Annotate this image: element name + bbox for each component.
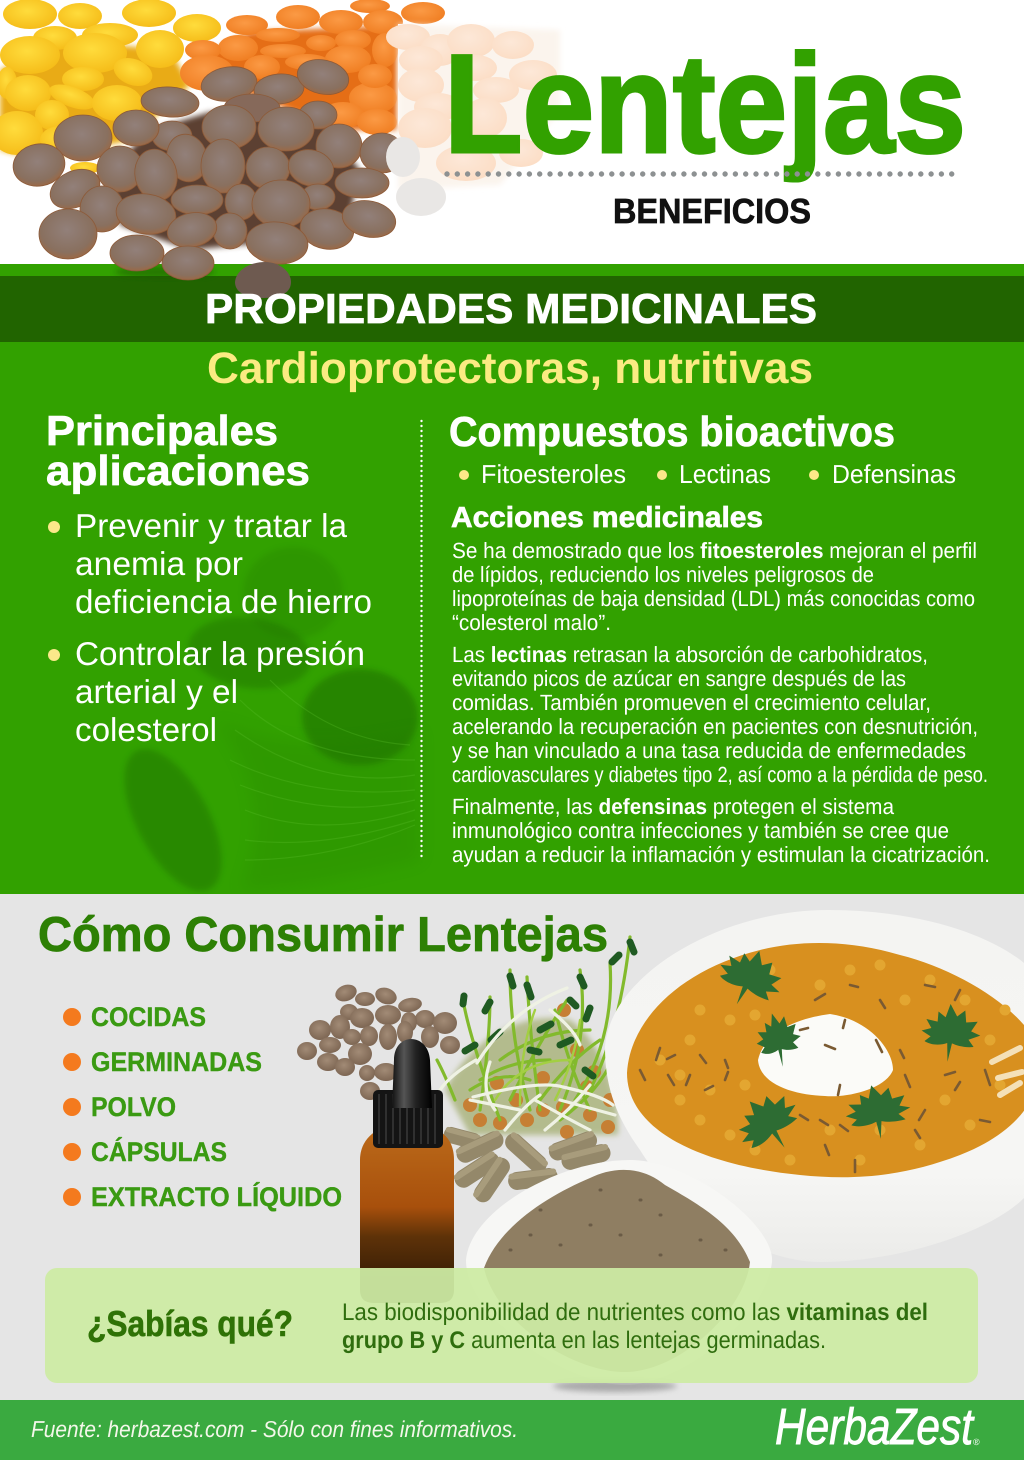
list: consumption forms: POLVO xyxy=(91,1092,176,1122)
text block: lectinas: evitando picos de azúcar en sangre después de las xyxy=(452,666,906,691)
panel: translucent title backing xyxy=(386,24,678,264)
list: compounds: Fitoesteroles xyxy=(481,459,626,489)
faded grey lentils xyxy=(386,137,446,216)
sprout foliage mass xyxy=(445,1018,618,1135)
heading: aplicaciones xyxy=(46,407,310,494)
callout heading: ¿Sabías qué? xyxy=(87,1303,293,1344)
list: item two: Controlar la presión xyxy=(75,635,365,672)
list: item one: deficiencia de hierro xyxy=(75,583,372,620)
list: item one xyxy=(48,507,372,620)
heading band: propiedades medicinales xyxy=(0,276,1024,342)
list: item two xyxy=(48,635,365,748)
soup peas xyxy=(660,965,1005,1160)
footer bar xyxy=(0,1400,1024,1460)
heading: aplicaciones: Principales xyxy=(46,407,278,454)
list: compounds: Lectinas xyxy=(679,459,771,489)
list: item one: Prevenir y tratar la xyxy=(75,507,348,544)
logo: HerbaZest: HerbaZest xyxy=(775,1398,975,1455)
subheading: properties: Cardioprotectoras, nutritivas xyxy=(207,344,813,393)
heading: como consumir lentejas: Cómo Consumir Lentejas xyxy=(38,908,608,962)
text block: fitoesteroles xyxy=(452,538,977,635)
text block: lectinas xyxy=(452,642,988,787)
image: dropper bottle xyxy=(360,1039,454,1303)
list: consumption forms: COCIDAS xyxy=(91,1002,206,1032)
parsley leaves xyxy=(708,938,983,1166)
image: lentil overlapping the dark band xyxy=(235,262,291,298)
callout text: grupo B y C aumenta en las lentejas germinadas. xyxy=(342,1327,826,1354)
text block: defensinas xyxy=(452,794,990,867)
image: orange lentils xyxy=(180,0,445,135)
soup highlights xyxy=(992,1048,1022,1095)
heading: aplicaciones: aplicaciones xyxy=(46,447,310,494)
image: brown lentils xyxy=(10,55,404,280)
text block: lectinas: acelerando la recuperación en pacientes con desnutrición, xyxy=(452,714,978,739)
title: Lentejas xyxy=(444,25,966,182)
text block: fitoesteroles: de lípidos, reduciendo los niveles peligrosos de xyxy=(452,562,874,587)
heading: propiedades medicinales: PROPIEDADES MEDICINALES xyxy=(205,285,817,332)
text block: fitoesteroles: Se ha demostrado que los fitoesteroles mejoran el perfil xyxy=(452,538,977,563)
powder speckles xyxy=(510,1190,726,1255)
logo: HerbaZest: ® xyxy=(973,1437,980,1447)
shadow under powder bowl xyxy=(553,1380,677,1392)
text block: defensinas: ayudan a reducir la inflamación y estimulan la cicatrización. xyxy=(452,842,990,867)
image: soup bowl xyxy=(605,910,1024,1262)
cumin seeds xyxy=(640,985,990,1172)
list: consumption forms: GERMINADAS xyxy=(91,1047,262,1077)
text block: lectinas: Las lectinas retrasan la absorción de carbohidratos, xyxy=(452,642,928,667)
dotted divider under title xyxy=(447,171,957,177)
image: yellow lentils xyxy=(0,0,221,174)
list: item two: colesterol xyxy=(75,711,217,748)
sour cream xyxy=(758,1014,893,1096)
subtitle: BENEFICIOS xyxy=(613,192,811,231)
sprout stems xyxy=(437,937,630,1120)
text block: fitoesteroles: lipoproteínas de baja densidad (LDL) más conocidas como xyxy=(452,586,975,611)
panel: green medicinal section background xyxy=(0,264,1024,906)
text block: fitoesteroles: “colesterol malo”. xyxy=(452,610,611,635)
sprout roots xyxy=(440,988,615,1130)
list: consumption forms: CÁPSULAS xyxy=(91,1137,227,1167)
panel: principales aplicaciones xyxy=(46,407,372,748)
heading: compuestos: Compuestos bioactivos xyxy=(449,408,895,455)
callout text xyxy=(342,1299,928,1354)
heading: acciones medicinales: Acciones medicinales xyxy=(451,502,763,534)
decorative cell texture xyxy=(105,547,420,906)
text block: lectinas: y se han vinculado a una tasa reducida de enfermedades xyxy=(452,738,966,763)
list: compounds xyxy=(459,459,956,489)
image: powder in white bowl xyxy=(466,1160,772,1385)
text block: lectinas: comidas. También promueven el crecimiento celular, xyxy=(452,690,931,715)
list: compounds: Defensinas xyxy=(832,459,956,489)
text block: defensinas: inmunológico contra infecciones y también se cree que xyxy=(452,818,949,843)
panel: compuestos bioactivos xyxy=(449,408,990,867)
footer source: Fuente: herbazest.com - Sólo con fines informativos. xyxy=(31,1416,518,1442)
callout text: Las biodisponibilidad de nutrientes como las vitaminas del xyxy=(342,1299,928,1326)
image: small brown lentils xyxy=(297,982,460,1100)
list: item one: anemia por xyxy=(75,545,243,582)
list: consumption forms: EXTRACTO LÍQUIDO xyxy=(91,1182,342,1212)
image: capsules xyxy=(442,1125,612,1206)
callout: sabias que xyxy=(45,1268,978,1383)
faded lentils xyxy=(386,24,557,181)
sprout leaves xyxy=(463,942,634,1076)
dotted column divider xyxy=(420,421,423,860)
panel: grey consumption section background xyxy=(0,894,1024,1400)
list: item two: arterial y el xyxy=(75,673,238,710)
image: lentil sprouts xyxy=(437,937,634,1135)
text block: defensinas: Finalmente, las defensinas protegen el sistema xyxy=(452,794,895,819)
list: consumption forms xyxy=(63,1002,342,1212)
sprout seeds xyxy=(470,1010,610,1132)
